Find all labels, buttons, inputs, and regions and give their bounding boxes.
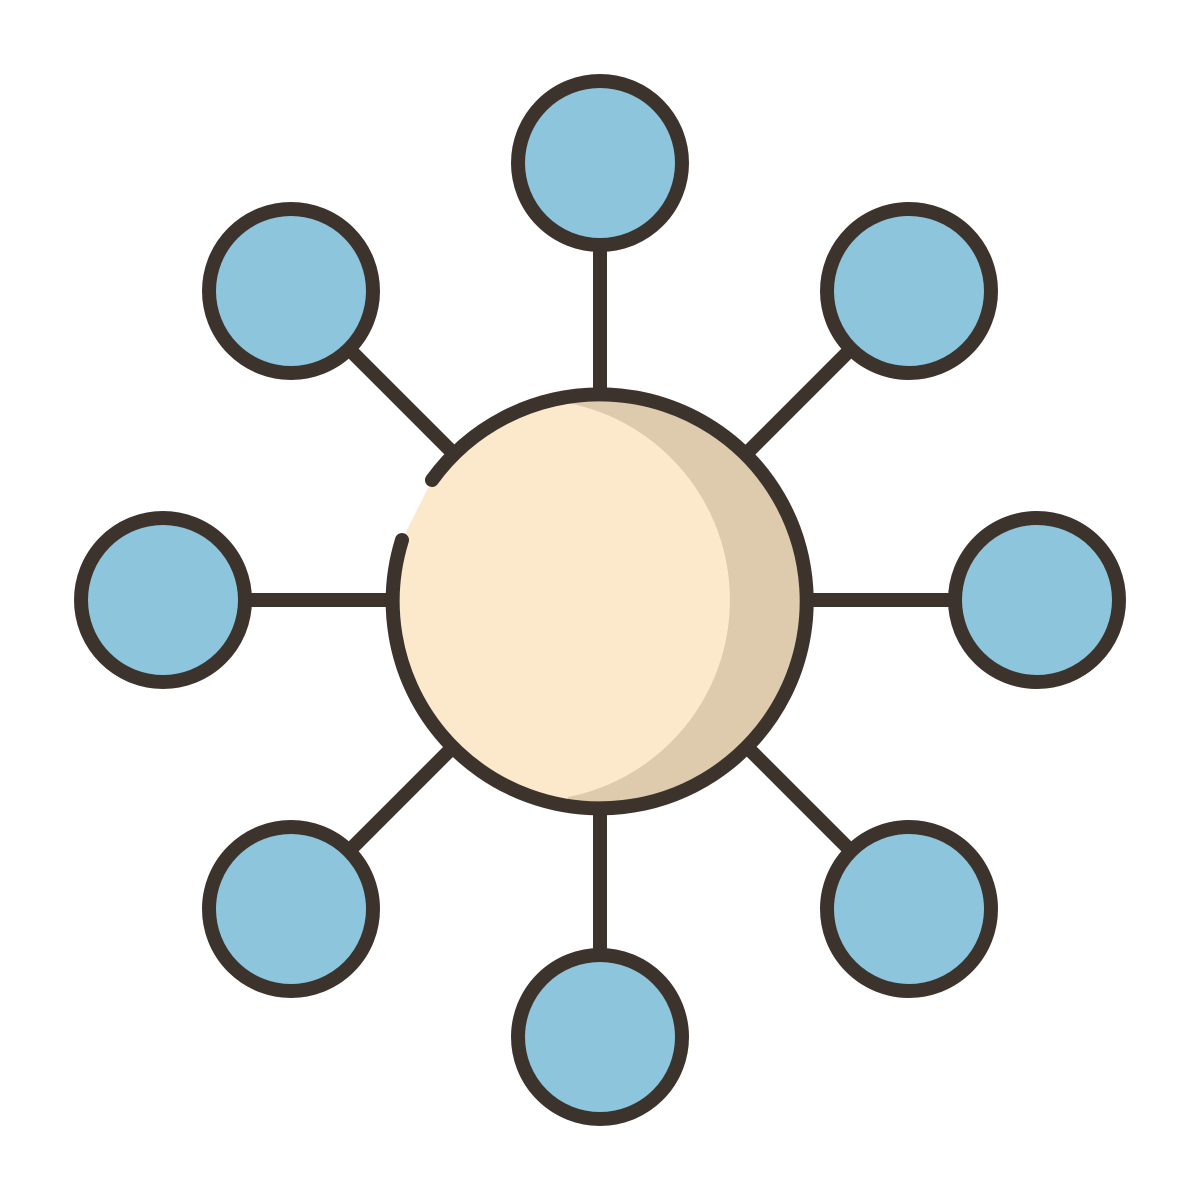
node: top xyxy=(518,81,682,245)
central hub circle xyxy=(393,393,807,808)
hub outline with gap xyxy=(393,394,807,808)
node: left xyxy=(81,518,245,682)
outer nodes xyxy=(81,81,1119,1119)
node: bottom xyxy=(518,955,682,1119)
node: right xyxy=(955,518,1119,682)
node: top left xyxy=(209,209,373,373)
hub cream fill xyxy=(393,394,807,808)
node: bottom right xyxy=(827,827,991,991)
connector lines between hub and outer nodes xyxy=(245,245,955,955)
node: top right xyxy=(827,209,991,373)
hub shaded crescent xyxy=(568,393,807,807)
node: bottom left xyxy=(209,827,373,991)
